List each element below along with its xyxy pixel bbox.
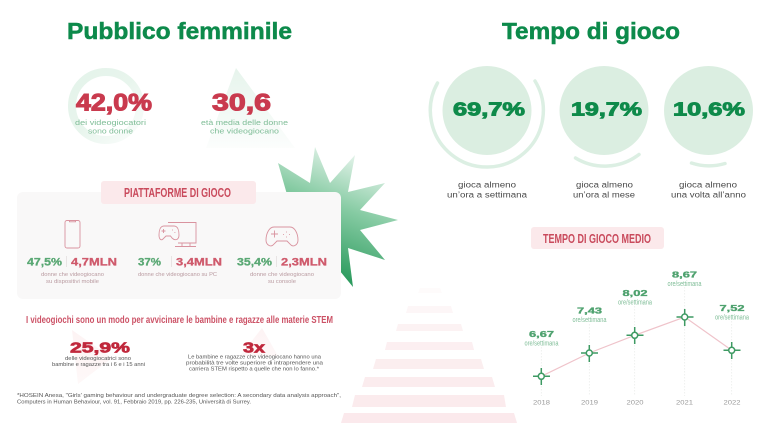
year axis labels: 2022 (724, 400, 741, 406)
caption: probabilità tre volte superiore di intraprendere una (186, 360, 323, 366)
title: Tempo di gioco: Tempo di gioco (502, 18, 680, 44)
data labels: 7,43 (577, 306, 602, 316)
stat: mobile: 4,7MLN (71, 257, 117, 269)
year axis labels: 2018 (533, 400, 550, 406)
caption: che videogiocano (210, 126, 279, 136)
heading: STEM: I videogiochi sono un modo per avvicinare le bambine e ragazze alle materie STEM (26, 314, 333, 326)
panel: piattaforme di gioco (17, 181, 341, 299)
icon: PC with gamepad (159, 222, 196, 246)
data labels: 7,52 (720, 303, 745, 313)
data point markers (533, 309, 740, 385)
panel background (17, 192, 341, 299)
stat: 42,0% of players are women (72, 72, 152, 140)
gauge: 19,7%: gioca almeno (576, 181, 634, 190)
caption: sono donne (88, 126, 133, 136)
stat: console: su console (268, 279, 296, 285)
heading banner: tempo di gioco medio (531, 227, 664, 249)
stat: mobile: 47,5% (27, 257, 62, 269)
heading banner: tempo di gioco medio: TEMPO DI GIOCO MEDIO (543, 232, 651, 246)
gauge: 69,7%: gioca almeno (458, 181, 517, 190)
icon: console gamepad (266, 227, 298, 246)
stat: console: donne che videogiocano (250, 272, 314, 278)
gauge: 10,6%: 10,6% (673, 100, 745, 120)
data labels: 8,02 (622, 288, 648, 298)
stat: 3x (186, 328, 323, 372)
data labels: ore/settimana (572, 317, 607, 324)
data labels: ore/settimana (715, 314, 749, 322)
heading banner (101, 181, 256, 204)
caption: dei videogiocatori (75, 118, 146, 127)
footnote: *HOSEIN Anesa, "Girls' gaming behaviour and undergraduate degree selection: A secondary data analysis approach", (17, 393, 341, 399)
decorative pale triangle (72, 330, 112, 384)
data labels: 8,67 (672, 270, 697, 280)
caption: età media delle donne (201, 118, 288, 127)
stat: 30,6 average age (201, 68, 295, 148)
title: Pubblico femminile: Pubblico femminile (67, 18, 292, 44)
stat: PC (138, 256, 222, 278)
gauge: 10,6% (664, 66, 753, 200)
value 30,6: 30,6 (212, 90, 271, 116)
caption: Le bambine e ragazze che videogiocano hanno una (188, 354, 321, 360)
gauge: 69,7%: 69,7% (453, 100, 525, 120)
icon: smartphone (65, 220, 80, 248)
caption: bambine e ragazze tra i 6 e i 15 anni (52, 362, 145, 368)
stat: console: 2,3MLN (281, 257, 327, 269)
year axis labels: 2019 (581, 400, 598, 406)
decorative green star (278, 147, 398, 287)
stat: mobile: su dispositivi mobile (46, 279, 99, 285)
line chart: average play time (524, 270, 749, 406)
caption: carriera STEM rispetto a quelle che non lo fanno.* (189, 366, 319, 372)
value 25,9%: 25,9% (70, 340, 130, 357)
stat: PC: 37% (138, 257, 161, 269)
year axis labels: 2020 (626, 400, 644, 406)
data labels: ore/settimana (618, 300, 652, 306)
gauge: 69,7% (430, 66, 543, 200)
gauge: 10,6%: una volta all’anno (671, 191, 747, 200)
gauge: 19,7% (560, 66, 648, 200)
decorative ring behind 42,0% (72, 72, 140, 140)
data labels: 6,67 (529, 329, 554, 339)
caption: delle videogiocatrici sono (65, 356, 131, 362)
stat: console: 35,4% (237, 257, 272, 269)
gauge: 10,6%: gioca almeno (679, 181, 738, 190)
decorative pale triangle (240, 328, 278, 356)
data labels (524, 270, 749, 348)
gauge: 19,7%: 19,7% (571, 100, 642, 120)
gauge: 19,7%: un’ora al mese (573, 191, 636, 200)
value 3x: 3x (243, 340, 266, 357)
gauge: 69,7%: un’ora a settimana (447, 191, 528, 200)
footnote: Computers in Human Behaviour, vol. 91, Febbraio 2019, pp. 226-235, Università di Surrey. (17, 400, 251, 406)
year axis labels: 2021 (676, 400, 693, 406)
data labels: ore/settimana (524, 340, 559, 348)
stat: PC: donne che videogiocano su PC (138, 272, 217, 278)
stat: console (237, 256, 327, 285)
stat: mobile: donne che videogiocano (41, 272, 104, 278)
stat: mobile (27, 256, 117, 285)
data labels: ore/settimana (668, 281, 702, 288)
stat: PC: 3,4MLN (176, 257, 222, 269)
decorative pink stepped pyramid (341, 288, 517, 423)
stat: 25,9% (52, 330, 145, 384)
decorative triangle behind 30,6 (206, 68, 295, 148)
year axis labels (533, 400, 741, 406)
heading banner: PIATTAFORME DI GIOCO (124, 186, 231, 200)
value 42,0%: 42,0% (76, 90, 152, 116)
